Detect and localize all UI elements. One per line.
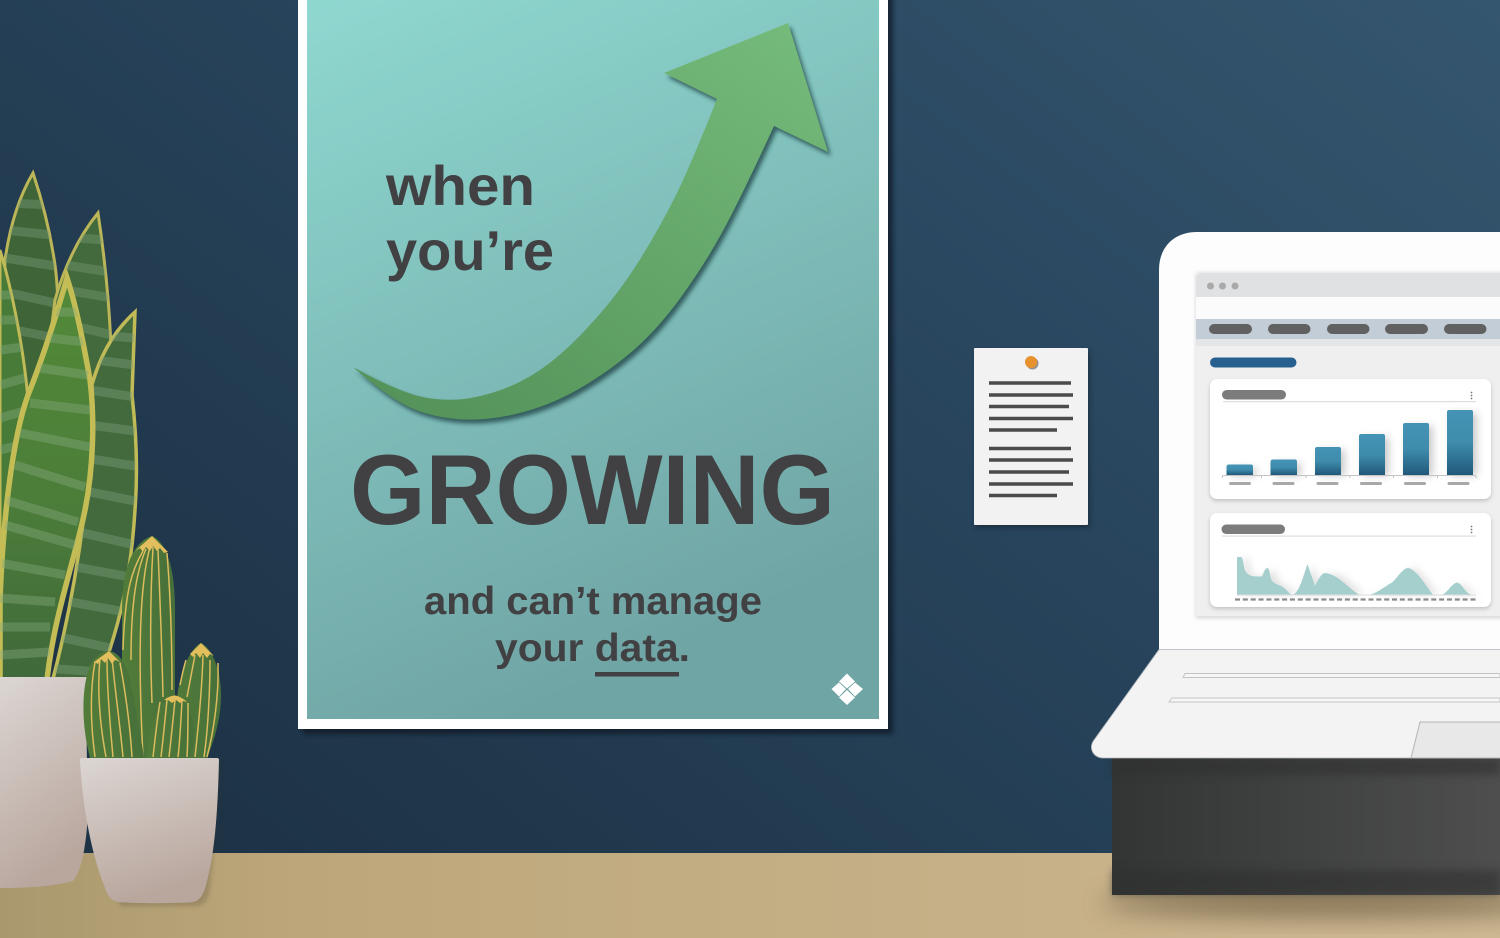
large pot bbox=[0, 677, 88, 888]
area chart shadow bbox=[1243, 558, 1482, 595]
text: GROWING: GROWING bbox=[350, 434, 835, 545]
area chart bbox=[1237, 557, 1476, 595]
center cactus arm bbox=[147, 696, 194, 758]
card surface bbox=[1210, 379, 1491, 499]
poster bbox=[298, 0, 893, 734]
small pot bbox=[80, 758, 219, 903]
text: and can't manage: and can’t manage bbox=[424, 580, 762, 623]
table top bbox=[0, 853, 1500, 938]
card surface bbox=[1210, 513, 1491, 607]
poster white frame bbox=[298, 0, 888, 729]
menu dots bbox=[1471, 526, 1472, 533]
area chart baseline bbox=[1237, 594, 1476, 596]
address bar bbox=[1196, 297, 1500, 319]
left cactus arm bbox=[83, 651, 144, 758]
table shadow under laptop bbox=[1100, 889, 1500, 917]
laptop keyboard deck bbox=[1091, 650, 1500, 758]
axis labels bbox=[1229, 482, 1470, 485]
nav shade strip bbox=[1196, 339, 1500, 346]
browser window bbox=[1196, 273, 1500, 618]
section heading pill bbox=[1210, 358, 1296, 368]
note text lines bbox=[989, 383, 1073, 496]
menu dots bbox=[1471, 392, 1472, 399]
laptop dark stand bbox=[1112, 757, 1500, 895]
far-left leaf bbox=[0, 250, 28, 548]
keyboard slots bbox=[1169, 674, 1500, 702]
snake plant bbox=[0, 173, 136, 690]
growth arrow shadow bbox=[356, 27, 831, 424]
nav bar bbox=[1196, 319, 1500, 339]
back-left leaf bbox=[4, 170, 58, 387]
text: when: when bbox=[385, 154, 535, 217]
bar chart card bbox=[1210, 379, 1491, 501]
card title bbox=[1222, 524, 1285, 534]
window control dots bbox=[1207, 282, 1238, 290]
small cactus plant bbox=[80, 536, 222, 906]
pinned note bbox=[974, 348, 1090, 528]
underline below data bbox=[595, 672, 679, 676]
area chart card bbox=[1210, 513, 1491, 609]
back-center leaf bbox=[50, 210, 112, 378]
laptop bbox=[1091, 232, 1500, 917]
note paper bbox=[974, 348, 1088, 525]
orange pin bbox=[1025, 356, 1038, 370]
right cactus arm bbox=[170, 643, 221, 758]
card title bbox=[1222, 390, 1286, 400]
trackpad bbox=[1411, 722, 1500, 758]
card rule bbox=[1223, 401, 1476, 402]
area chart time ticks bbox=[1235, 598, 1476, 601]
window body bbox=[1196, 273, 1500, 616]
title bar bbox=[1196, 273, 1500, 297]
growth arrow bbox=[353, 23, 828, 420]
window shadow bbox=[1196, 273, 1500, 618]
text: you're: you’re bbox=[386, 219, 554, 282]
small pot shadow bbox=[84, 762, 222, 906]
card shadow bbox=[1210, 515, 1491, 609]
bars bbox=[1226, 410, 1473, 475]
icon: diamond logo bbox=[832, 674, 863, 705]
chart axis bbox=[1222, 476, 1476, 478]
nav pills bbox=[1209, 324, 1486, 334]
card rule bbox=[1222, 536, 1476, 537]
front leaf bbox=[0, 278, 93, 690]
stand inner shading bbox=[1112, 758, 1500, 895]
bar shadows bbox=[1231, 413, 1477, 476]
poster shadow bbox=[303, 0, 893, 734]
note shadow bbox=[976, 351, 1090, 528]
main cactus column bbox=[122, 536, 175, 758]
laptop screen bbox=[1159, 232, 1500, 652]
right leaf bbox=[45, 312, 136, 690]
poster teal panel bbox=[307, 0, 879, 719]
text: your data.: your data. bbox=[495, 627, 690, 670]
card shadow bbox=[1210, 381, 1491, 501]
